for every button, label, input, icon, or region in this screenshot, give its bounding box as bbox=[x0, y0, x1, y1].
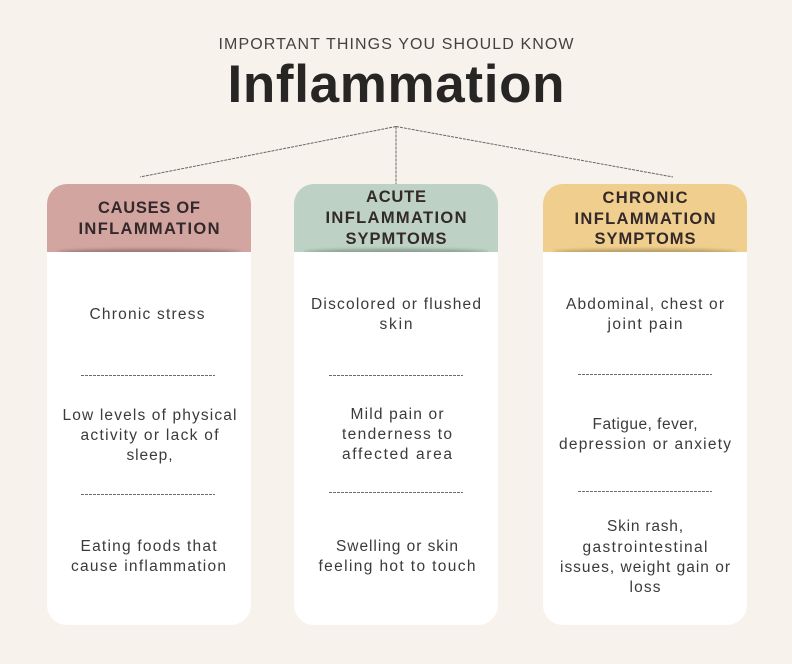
text: swelling: Swelling or skin bbox=[336, 538, 458, 555]
text: skin rash: Skin rash, bbox=[607, 518, 683, 535]
text: fatigue: depression or anxiety bbox=[559, 436, 731, 453]
text: mild pain: Mild pain or bbox=[350, 406, 444, 423]
text: skin rash: gastrointestinal bbox=[582, 539, 708, 556]
header: acute: INFLAMMATION bbox=[326, 209, 466, 227]
text: fatigue bbox=[559, 416, 731, 453]
header: acute bbox=[294, 184, 498, 255]
text: eating foods bbox=[71, 538, 226, 575]
text: abdominal: joint pain bbox=[606, 316, 682, 333]
text: skin rash bbox=[560, 518, 730, 596]
text: mild pain: affected area bbox=[342, 446, 452, 463]
connector lines bbox=[140, 126, 673, 185]
card body: acute bbox=[294, 252, 498, 625]
panel: causes bbox=[47, 184, 251, 625]
text: discolored: skin bbox=[380, 316, 412, 333]
text: swelling: feeling hot to touch bbox=[318, 558, 476, 575]
subtitle: IMPORTANT THINGS YOU SHOULD KNOW bbox=[218, 36, 574, 53]
text: low levels bbox=[62, 407, 236, 464]
text: discolored: Discolored or flushed bbox=[311, 296, 481, 313]
title: Inflammation bbox=[228, 55, 564, 114]
text: fatigue: Fatigue, fever, bbox=[592, 416, 698, 433]
text: discolored bbox=[311, 296, 481, 333]
panel: chronic bbox=[543, 184, 747, 625]
text: low levels: activity or lack of bbox=[80, 427, 219, 444]
text: eating foods: Eating foods that bbox=[80, 538, 217, 555]
text: mild pain: tenderness to bbox=[342, 426, 452, 443]
card body: causes bbox=[47, 252, 251, 625]
text: abdominal bbox=[566, 296, 724, 333]
text: mild pain bbox=[342, 406, 452, 463]
header: chronic: INFLAMMATION bbox=[574, 210, 716, 228]
card body: chronic bbox=[543, 252, 747, 625]
text: swelling bbox=[318, 538, 476, 575]
header: causes bbox=[47, 184, 251, 255]
header: chronic: CHRONIC bbox=[602, 189, 688, 207]
text: skin rash: issues, weight gain or bbox=[560, 559, 730, 576]
text: abdominal: Abdominal, chest or bbox=[566, 296, 724, 313]
header: acute: SYPMTOMS bbox=[346, 230, 446, 248]
text: low levels: sleep, bbox=[126, 447, 172, 464]
header: chronic: SYMPTOMS bbox=[594, 230, 696, 248]
text: eating foods: cause inflammation bbox=[71, 558, 226, 575]
header: acute: ACUTE bbox=[366, 188, 426, 206]
header: chronic bbox=[543, 184, 747, 255]
text: skin rash: loss bbox=[630, 579, 661, 596]
header: causes: CAUSES OF bbox=[98, 199, 200, 217]
text: chronic stress: Chronic stress bbox=[90, 306, 205, 323]
text: low levels: Low levels of physical bbox=[62, 407, 236, 424]
panel: acute bbox=[294, 184, 498, 625]
header: causes: INFLAMMATION bbox=[78, 220, 220, 238]
